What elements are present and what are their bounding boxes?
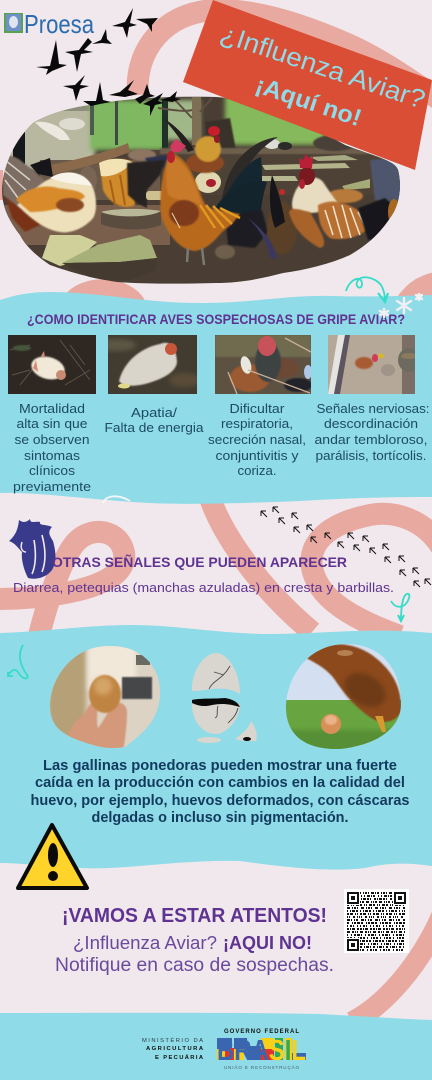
photo: dead bird [8, 335, 96, 394]
icon: white curl behind band [103, 496, 130, 503]
second hen [100, 159, 135, 207]
icon: teal curl arrow middle [391, 594, 409, 621]
text: mortality: clínicos [29, 463, 76, 478]
text: mortality: se observen [14, 432, 90, 447]
text: breathing difficulty: Dificultar [230, 401, 285, 416]
logo: Proesa [4, 9, 94, 39]
photo: nervous hen [328, 335, 420, 394]
text: apathy: Falta de energia [104, 420, 204, 435]
back rooster [163, 118, 194, 152]
text: mortality: alta sin que [16, 416, 88, 431]
callout: stay alert: Notifique en caso de sospechas. [55, 955, 334, 976]
logo: Governo Federal Brasil [217, 1029, 306, 1070]
logo: ministry of agriculture: AGRICULTURA [146, 1046, 204, 1052]
icon: teal curl arrow left [8, 645, 28, 678]
title: aqui no: ¡Aquí no! [252, 72, 365, 132]
left hen [5, 195, 40, 232]
QR code [344, 889, 409, 953]
logo: ministry of agriculture [142, 1037, 204, 1061]
panel: egg production band [0, 625, 432, 870]
text: breathing difficulty [208, 401, 306, 478]
icon: bird footprints [261, 507, 431, 587]
photo: sick roosters [215, 335, 312, 394]
logo: ministry of agriculture: MINISTÉRIO DA [142, 1037, 203, 1044]
band background [0, 625, 432, 870]
callout: stay alert [55, 905, 334, 976]
text: nervous signs: descordinación [324, 416, 418, 431]
icon: rooster head [9, 519, 56, 579]
wordmark: Proesa [24, 9, 94, 39]
logo: Governo Federal Brasil: GOVERNO FEDERAL [224, 1029, 299, 1035]
text: apathy: Apatia/ [131, 405, 177, 420]
text: mortality: Mortalidad [19, 401, 85, 416]
text: mortality: sintomas [24, 448, 81, 463]
icon: book [4, 13, 23, 33]
exclamation mark [48, 843, 58, 881]
wordmark: BRASIL [217, 1035, 306, 1067]
text: other signs detail: Diarrea, petequias (manchas azuladas) en cresta y barbillas. [13, 580, 394, 595]
callout: stay alert: ¿Influenza Aviar? [73, 933, 217, 953]
stones [146, 191, 162, 200]
photo: hen with egg on grass [284, 642, 404, 752]
paragraph: egg quality: huevo, por ejemplo, huevos deformados, con cáscaras [30, 792, 410, 809]
text: nervous signs: parálisis, tortícolis. [316, 448, 426, 463]
logo: ministry of agriculture: E PECUÁRIA [155, 1054, 204, 1061]
paragraph: egg quality [30, 757, 410, 826]
right rooster [327, 189, 363, 203]
center rooster body [160, 152, 240, 251]
text: nervous signs: andar tembloroso, [314, 432, 428, 447]
panel: footer band [0, 1013, 432, 1080]
text: breathing difficulty: respiratoria, [221, 416, 293, 431]
colored blocks [217, 1038, 306, 1060]
ground-pecking hen [215, 245, 235, 259]
icon: warning triangle [18, 825, 87, 888]
text: nervous signs [314, 401, 430, 463]
paragraph: egg quality: delgadas o incluso sin pigmentación. [92, 809, 348, 826]
title banner [183, 0, 432, 170]
text: mortality: previamente [13, 479, 91, 494]
photo: apathetic hen [108, 335, 197, 394]
paragraph: egg quality: Las gallinas ponedoras pueden mostrar una fuerte [43, 757, 397, 774]
center rooster tail [222, 137, 278, 200]
text: nervous signs: Señales nerviosas: [316, 401, 430, 416]
heading: other signs: OTRAS SEÑALES QUE PUEDEN APARECER [52, 553, 347, 570]
text: apathy [104, 405, 204, 435]
photo: deformed egg in hand [48, 644, 162, 752]
callout: stay alert: ¡AQUI NO! [223, 933, 312, 953]
band background [0, 292, 432, 504]
panel: symptoms band [0, 292, 432, 504]
icon: white sparkles [380, 294, 422, 317]
icon: teal curl arrow top [346, 277, 388, 302]
icon: flock of birds [36, 8, 181, 116]
text: breathing difficulty: coriza. [238, 463, 276, 478]
icon: broken egg [192, 653, 257, 743]
text: breathing difficulty: conjuntivitis y [216, 448, 299, 463]
text: breathing difficulty: secreción nasal, [208, 432, 306, 447]
title: influenza aviar: ¿Influenza Aviar? [217, 18, 429, 115]
paragraph: egg quality: caída en la producción con cambios en la calidad del [35, 774, 405, 791]
main photo: chickens [2, 96, 400, 284]
callout: stay alert: ¡VAMOS A ESTAR ATENTOS! [62, 905, 327, 927]
logo: Governo Federal Brasil: UNIÃO E RECONSTRUÇÃO [224, 1064, 299, 1070]
text: mortality [13, 401, 91, 494]
